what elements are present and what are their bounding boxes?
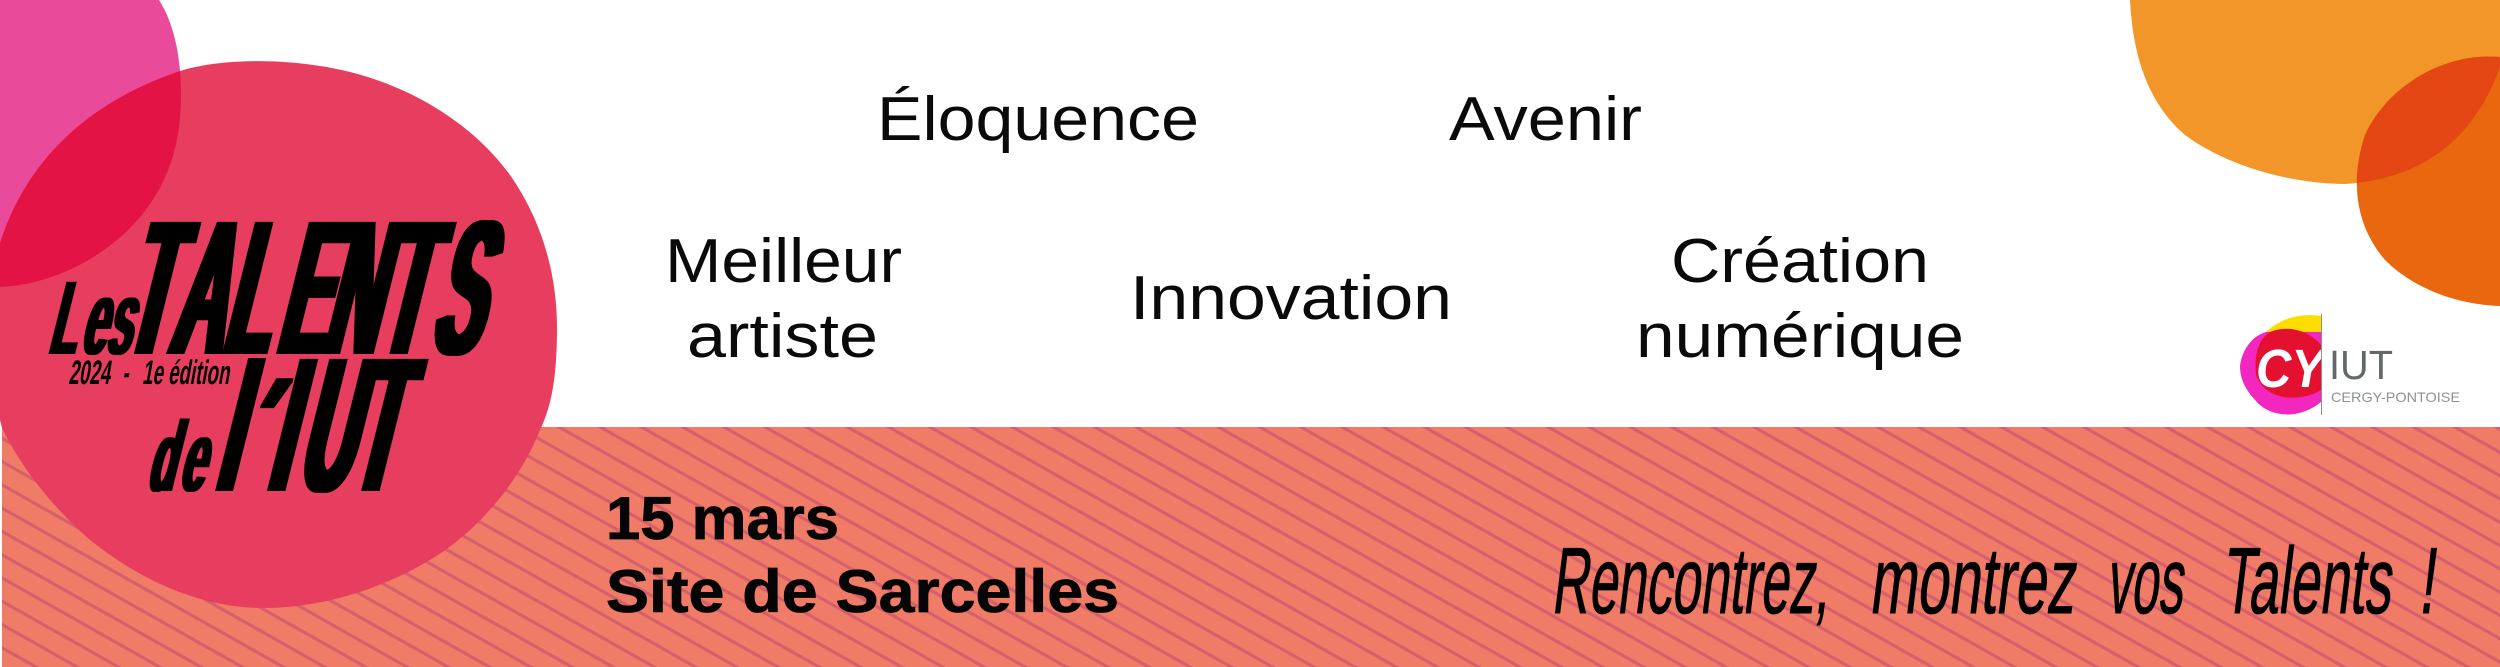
decorative blob: orange, top right: [2130, 0, 2500, 306]
logo: CY IUT Cergy-Pontoise: IUT: [2329, 342, 2393, 388]
edition line: -: [121, 353, 134, 391]
title word: de: de: [141, 400, 225, 512]
category: Avenir: Avenir: [1449, 85, 1642, 154]
category: Meilleur artiste: artiste: [687, 302, 878, 371]
title: Les Talents de l'IUT: [48, 220, 505, 493]
date and venue: [606, 485, 1119, 625]
slogan: vos: [2104, 528, 2192, 633]
striped band: [2, 427, 2500, 667]
logo: CY IUT Cergy-Pontoise: CERGY-PONTOISE: [2331, 389, 2460, 405]
slogan: !: [2416, 528, 2444, 633]
category: Création numérique: Création: [1671, 227, 1929, 296]
category: Création numérique: numérique: [1636, 302, 1964, 371]
category: Meilleur artiste: Meilleur: [665, 227, 902, 296]
slogan: montrez: [1867, 528, 2084, 633]
category: Meilleur artiste: [665, 227, 902, 371]
logo: CY IUT Cergy-Pontoise: CY: [2256, 339, 2329, 399]
title word: TALENTS: TALENTS: [111, 180, 521, 395]
category: Éloquence: Éloquence: [877, 85, 1199, 154]
edition line: 2024: [67, 353, 116, 391]
award categories: [665, 85, 1964, 371]
edition line: 1e: [141, 353, 168, 391]
title word: Les: Les: [42, 259, 153, 377]
title word: l'IUT: l´IUT: [197, 317, 436, 560]
decorative blob: pink and red, top left: [0, 0, 557, 608]
edition line: édition: [166, 353, 234, 391]
category: Innovation: Innovation: [1130, 264, 1452, 333]
category: Création numérique: [1636, 227, 1964, 371]
slogan: [1549, 528, 2444, 633]
date and venue: Site de Sarcelles: [606, 558, 1119, 625]
logo: CY IUT Cergy-Pontoise: [2240, 314, 2460, 415]
slogan: Rencontrez,: [1549, 528, 1838, 633]
date and venue: 15 mars: [606, 485, 839, 552]
